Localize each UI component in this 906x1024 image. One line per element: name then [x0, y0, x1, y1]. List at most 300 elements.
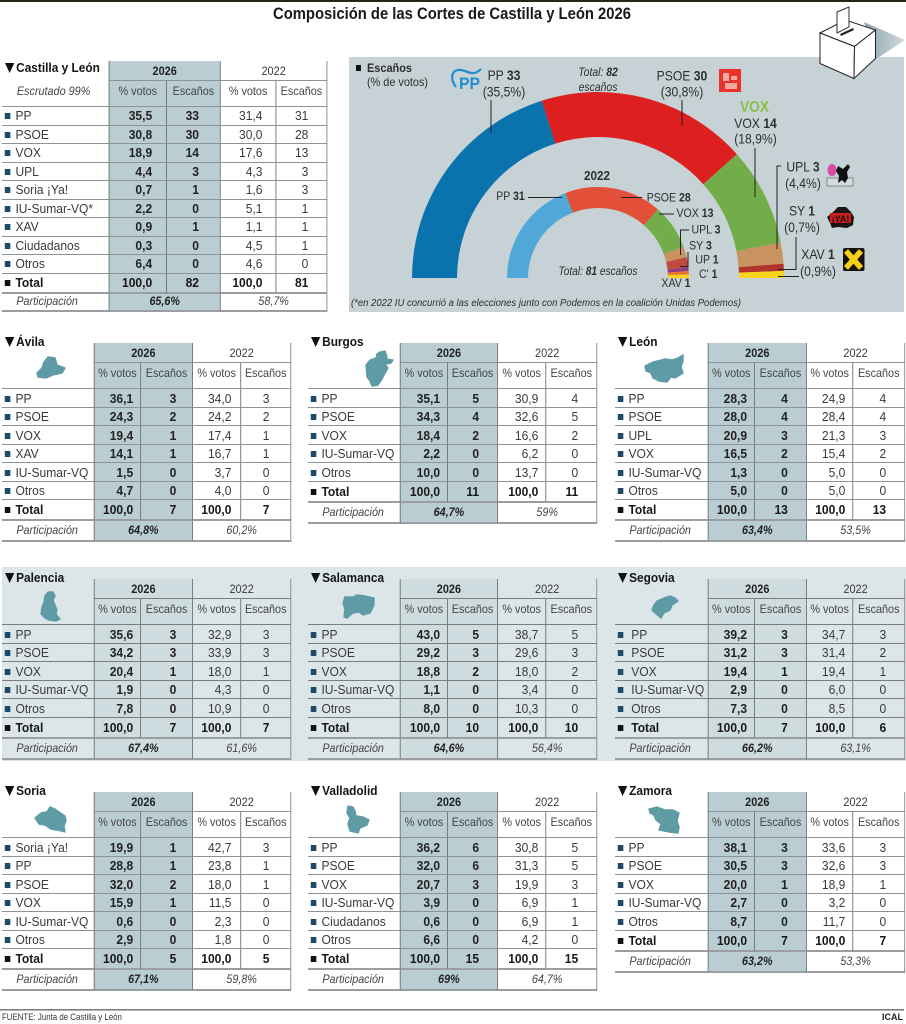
- table: Segovia results: 3: [781, 626, 788, 642]
- table: Castilla y León results: 65,6%: [149, 295, 180, 308]
- table: Salamanca results: VOX: [321, 664, 347, 678]
- table: Zamora results: 2022: [843, 794, 868, 808]
- table: Ávila results: 4,7: [116, 483, 133, 498]
- table: Burgos results: [308, 343, 598, 524]
- table: Palencia results: Total: [15, 720, 43, 735]
- table: Burgos results: 2: [472, 428, 479, 442]
- table: León results: PP: [628, 390, 645, 406]
- table: Zamora results: 33,6: [822, 840, 845, 854]
- table: León results: 13: [774, 502, 788, 517]
- table: Burgos results: 30,9: [515, 390, 538, 406]
- table: León results: 4: [781, 409, 788, 424]
- table: Zamora results: [615, 792, 906, 973]
- table: León results: IU-Sumar-VQ: [628, 464, 701, 480]
- table: Burgos results: 59%: [536, 506, 558, 518]
- credit: ICAL: ICAL: [882, 1012, 903, 1022]
- table: Soria results: 100,0: [201, 951, 231, 966]
- table: Burgos results: 18,4: [417, 428, 440, 442]
- table: Zamora results: 0: [879, 914, 886, 928]
- band: middle row background: [2, 567, 906, 761]
- table: Palencia results: 20,4: [110, 664, 133, 678]
- table: Castilla y León results: PP: [15, 108, 32, 123]
- table: Zamora results: 8,7: [730, 914, 747, 928]
- table: Segovia results: 39,2: [724, 626, 747, 642]
- table: Castilla y León results: 1: [192, 182, 199, 197]
- table: Soria results: Otros: [15, 932, 45, 947]
- table: Castilla y León results: 13: [295, 145, 308, 160]
- table: Zamora results: 20,0: [724, 876, 747, 892]
- table: Soria results: 1: [170, 858, 176, 873]
- table: Segovia results: % votos: [712, 603, 751, 616]
- table: Burgos results: 35,1: [417, 390, 440, 406]
- icon: León map: [644, 354, 684, 383]
- table: León results: 20,9: [724, 428, 747, 442]
- table: Zamora results: 2,7: [730, 895, 747, 910]
- table: Segovia results: IU-Sumar-VQ: [631, 682, 704, 697]
- table: Salamanca results: 64,6%: [434, 742, 464, 754]
- table: León results: 5,0: [829, 464, 845, 480]
- panel: Burgos: [308, 334, 598, 524]
- table: Ávila results: 24,2: [208, 409, 231, 424]
- table: Burgos results: Escaños: [452, 367, 493, 380]
- table: Castilla y León results: 0,9: [135, 219, 152, 234]
- table: Soria results: PSOE: [15, 876, 49, 892]
- table: Soria results: 0: [263, 914, 269, 928]
- table: Ávila results: 0: [263, 483, 269, 498]
- table: Soria results: 0: [170, 932, 176, 947]
- table: Valladolid results: 100,0: [508, 951, 538, 966]
- table: León results: 3: [781, 428, 788, 442]
- table: Salamanca results: 1,1: [423, 682, 440, 697]
- table: Salamanca results: % votos: [502, 603, 541, 616]
- table: Segovia results: 2,9: [730, 682, 747, 697]
- table: Valladolid results: 15: [466, 951, 479, 966]
- table: Ávila results: 64,8%: [128, 524, 159, 536]
- label: PSOE 28: PSOE 28: [647, 192, 691, 205]
- table: Valladolid results: 0: [472, 914, 479, 928]
- table: Ávila results: 100,0: [103, 502, 133, 517]
- table: Segovia results: 6,0: [829, 682, 845, 697]
- icon: ballot box: [820, 7, 905, 78]
- table: Soria results: 2026: [131, 794, 156, 808]
- table: Salamanca results: Otros: [321, 700, 351, 716]
- table: Salamanca results: 2026: [437, 582, 461, 596]
- table: Salamanca results: 100,0: [410, 720, 440, 735]
- table: Valladolid results: 6,9: [522, 914, 538, 928]
- total 2022 label: Total: 81 escaños: [559, 265, 638, 278]
- table: Ávila results: IU-Sumar-VQ: [15, 464, 88, 480]
- table: Ávila results: 1: [263, 446, 269, 461]
- table: León results: 0: [781, 464, 788, 480]
- table: Salamanca results: PSOE: [321, 645, 355, 660]
- table: Ávila results: 3: [263, 390, 269, 406]
- table: Valladolid results: 4,2: [522, 932, 538, 947]
- table: Valladolid results: % votos: [405, 816, 443, 829]
- table: Segovia results: 0: [781, 682, 788, 697]
- table: Segovia results: 31,4: [822, 645, 845, 660]
- label: XAV 1 2022: XAV 1: [661, 277, 691, 290]
- table: Segovia results: Escaños: [760, 603, 801, 616]
- table: Valladolid results: PP: [321, 840, 338, 854]
- table: Salamanca results: 3,4: [522, 682, 538, 697]
- table: Ávila results: 16,7: [208, 446, 231, 461]
- table: Palencia results: 1: [170, 664, 176, 678]
- table: Castilla y León results: 4,6: [246, 256, 262, 271]
- table: Ávila results: Participación: [16, 524, 78, 536]
- heading: Soria: Soria: [16, 783, 46, 798]
- table: Burgos results: 2022: [535, 346, 559, 360]
- table: Ávila results: 3,7: [215, 464, 231, 480]
- panel: Salamanca: [308, 570, 598, 760]
- label: UPL 3: [785, 159, 821, 191]
- table: Soria results: % votos: [98, 816, 137, 829]
- table: Salamanca results: 3: [472, 645, 479, 660]
- table: Zamora results: 3,2: [829, 895, 845, 910]
- table: Segovia results: 3: [781, 645, 788, 660]
- table: Salamanca results: 100,0: [508, 720, 538, 735]
- table: Burgos results: % votos: [405, 367, 443, 380]
- leader: PSOE: [681, 100, 683, 126]
- table: León results: 100,0: [815, 502, 845, 517]
- table: Soria results: 11,5: [209, 895, 231, 910]
- label: SY 1: [784, 203, 820, 235]
- table: Burgos results: 0: [572, 446, 578, 461]
- label: PP 33: (35,5%): [483, 84, 525, 100]
- table: Ávila results: Otros: [15, 483, 45, 498]
- table: Burgos results: 34,3: [417, 409, 440, 424]
- table: Zamora results: 0: [781, 914, 788, 928]
- table: Segovia results: 1: [879, 664, 886, 678]
- table: Castilla y León results: 30: [186, 126, 199, 142]
- table: Salamanca results: 29,2: [417, 645, 440, 660]
- table: Castilla y León results: % votos: [229, 85, 267, 98]
- table: Valladolid results: Otros: [321, 932, 351, 947]
- heading: Burgos: Burgos: [322, 334, 364, 349]
- table: Zamora results: 18,9: [822, 876, 845, 892]
- table: Ávila results: 2: [170, 409, 176, 424]
- icon: UPL logo: [827, 164, 853, 186]
- table: Zamora results: 32,6: [822, 858, 845, 873]
- table: Salamanca results: Escaños: [452, 603, 493, 616]
- table: Ávila results: 1: [263, 428, 269, 442]
- table: Burgos results: 0: [472, 446, 479, 461]
- table: León results: 0: [781, 483, 788, 498]
- heading: Segovia: Segovia: [629, 570, 675, 585]
- table: Burgos results: 11: [565, 484, 578, 499]
- source note: FUENTE: Junta de Castilla y León: [2, 1012, 122, 1022]
- table: Palencia results: 2026: [131, 582, 156, 596]
- table: Valladolid results: 15: [565, 951, 578, 966]
- table: León results: [615, 343, 906, 542]
- table: Castilla y León results: 4,3: [246, 164, 262, 178]
- table: Salamanca results: IU-Sumar-VQ: [321, 682, 394, 697]
- table: Palencia results: 34,2: [110, 645, 133, 660]
- table: Zamora results: 3: [879, 858, 886, 873]
- table: Zamora results: PP: [628, 840, 645, 854]
- table: Ávila results: 4,0: [215, 483, 231, 498]
- panel: Soria: [2, 783, 292, 991]
- table: Burgos results: 11: [466, 484, 479, 499]
- table: Castilla y León results: UPL: [15, 164, 39, 178]
- table: Burgos results: 0: [472, 464, 479, 480]
- table: Castilla y León results: 6,4: [135, 256, 152, 271]
- label: VOX 13: VOX 13: [677, 207, 713, 220]
- table: Soria results: 2,9: [116, 932, 133, 947]
- total 2026 label: Total: 82: [578, 66, 619, 79]
- table: Segovia results: 19,4: [822, 664, 845, 678]
- table: Ávila results: PSOE: [15, 409, 49, 424]
- table: Segovia results: 100,0: [815, 720, 845, 735]
- panel: Valladolid: [308, 783, 598, 991]
- table: Valladolid results: 0: [572, 932, 578, 947]
- table: Soria results: 59,8%: [226, 972, 257, 986]
- table: Castilla y León results: 0: [192, 238, 199, 252]
- footnote: (*en 2022 IU concurrió a las elecciones junto con Podemos en la coalición Unidas Podemos): [351, 297, 741, 309]
- label: UPL 3: UPL 3: [786, 159, 820, 175]
- table: Castilla y León results: 4,4: [135, 164, 152, 178]
- table: León results: 2022: [843, 346, 868, 360]
- table: Soria results: 5: [170, 951, 176, 966]
- table: Zamora results: 0: [879, 895, 886, 910]
- table: Segovia results: [615, 579, 906, 760]
- table: Soria results: 15,9: [110, 895, 133, 910]
- label: PSOE 30: PSOE 30: [657, 68, 707, 84]
- table: Castilla y León results: 4,5: [246, 238, 262, 252]
- table: León results: Otros: [628, 483, 658, 498]
- table: Soria results: Participación: [16, 972, 78, 986]
- table: Castilla y León results: [2, 61, 328, 312]
- table: Valladolid results: 0: [472, 932, 479, 947]
- table: Soria results: 3: [263, 840, 269, 854]
- table: Burgos results: 32,6: [515, 409, 538, 424]
- table: Castilla y León results: Ciudadanos: [15, 238, 80, 252]
- table: Soria results: 67,1%: [128, 972, 159, 986]
- table: Burgos results: Participación: [322, 506, 384, 518]
- table: Castilla y León results: 100,0: [122, 275, 152, 290]
- table: Soria results: 0,6: [116, 914, 133, 928]
- table: Salamanca results: 10: [565, 720, 578, 735]
- table: Ávila results: 7: [263, 502, 269, 517]
- table: Salamanca results: 3: [572, 645, 578, 660]
- table: Valladolid results: 6: [472, 840, 479, 854]
- icon: Soria Ya logo: [827, 207, 854, 228]
- table: Soria results: 2: [170, 876, 176, 892]
- table: Valladolid results: 6,6: [423, 932, 440, 947]
- table: León results: 28,4: [822, 409, 845, 424]
- table: Valladolid results: 64,7%: [532, 972, 562, 986]
- table: Zamora results: 3: [781, 858, 788, 873]
- label: SY 1: SY 1: [789, 203, 815, 219]
- table: Valladolid results: Ciudadanos: [321, 914, 386, 928]
- table: Segovia results: 19,4: [724, 664, 747, 678]
- table: Soria results: 32,0: [110, 876, 133, 892]
- table: Valladolid results: 2026: [437, 794, 461, 808]
- table: Soria results: 0: [263, 895, 269, 910]
- table: Valladolid results: Total: [321, 951, 349, 966]
- table: Salamanca results: 29,6: [515, 645, 538, 660]
- table: Segovia results: Total: [631, 720, 659, 735]
- table: Salamanca results: 43,0: [417, 626, 440, 642]
- table: Valladolid results: Escaños: [452, 816, 493, 829]
- table: Palencia results: Otros: [15, 700, 45, 716]
- table: Burgos results: Otros: [321, 464, 351, 480]
- table: Valladolid results: 0: [472, 895, 479, 910]
- table: Segovia results: 0: [879, 682, 886, 697]
- label: VOX 14: [734, 115, 778, 147]
- table: Burgos results: 2: [572, 428, 578, 442]
- table: Castilla y León results: Participación: [16, 295, 78, 308]
- table: Palencia results: 1,9: [116, 682, 133, 697]
- table: Palencia results: VOX: [15, 664, 41, 678]
- table: Castilla y León results: 2022: [261, 64, 286, 78]
- icon: Segovia map: [651, 595, 679, 619]
- heading: Salamanca: Salamanca: [322, 570, 384, 585]
- table: Soria results: PP: [15, 858, 32, 873]
- table: Castilla y León results: 30,0: [239, 126, 262, 142]
- table: Palencia results: 3: [170, 626, 176, 642]
- table: Castilla y León results: XAV: [15, 219, 39, 234]
- label: 2022: 2022: [584, 168, 610, 183]
- table: Palencia results: PSOE: [15, 645, 49, 660]
- table: Soria results: Soria ¡Ya!: [15, 840, 68, 854]
- table: Zamora results: 0: [781, 895, 788, 910]
- legend: Escaños: (% de votos): [367, 75, 428, 89]
- table: Valladolid results: 36,2: [417, 840, 440, 854]
- table: Burgos results: 64,7%: [434, 506, 464, 518]
- table: Valladolid results: Participación: [322, 972, 384, 986]
- table: Valladolid results: 20,7: [417, 876, 440, 892]
- table: Salamanca results: 18,8: [417, 664, 440, 678]
- table: Zamora results: 11,7: [823, 914, 845, 928]
- table: Palencia results: 4,3: [215, 682, 231, 697]
- table: Segovia results: 8,5: [829, 700, 845, 716]
- table: Burgos results: % votos: [502, 367, 541, 380]
- table: León results: 4: [781, 390, 788, 406]
- table: Castilla y León results: 28: [295, 126, 308, 142]
- heading: León: León: [629, 334, 657, 349]
- table: Zamora results: 2026: [745, 794, 769, 808]
- table: Valladolid results: VOX: [321, 876, 347, 892]
- table: Zamora results: PSOE: [628, 858, 662, 873]
- table: Ávila results: Escaños: [245, 367, 287, 380]
- table: Ávila results: 1: [170, 428, 176, 442]
- panel: León: [615, 334, 906, 542]
- table: Palencia results: 33,9: [208, 645, 231, 660]
- panel: Segovia: [615, 570, 906, 760]
- table: Soria results: 1,8: [215, 932, 231, 947]
- table: Salamanca results: 10,3: [515, 700, 538, 716]
- table: León results: 100,0: [717, 502, 747, 517]
- table: Soria results: 5: [263, 951, 269, 966]
- table: Salamanca results: 0: [472, 700, 479, 716]
- table: Palencia results: Escaños: [245, 603, 287, 616]
- table: Ávila results: VOX: [15, 428, 41, 442]
- table: Valladolid results: 30,8: [515, 840, 538, 854]
- table: Segovia results: 0: [879, 700, 886, 716]
- table: Ávila results: % votos: [98, 367, 137, 380]
- table: León results: 2: [781, 446, 788, 461]
- heading: Ávila: Ávila: [16, 334, 44, 349]
- table: Valladolid results: 0,6: [423, 914, 440, 928]
- table: Salamanca results: 18,0: [515, 664, 538, 678]
- table: León results: 63,4%: [742, 524, 773, 536]
- table: Ávila results: 2022: [229, 346, 254, 360]
- table: Salamanca results: 2022: [535, 582, 559, 596]
- table: León results: 28,3: [724, 390, 747, 406]
- panel: Ávila: [2, 334, 292, 542]
- table: Zamora results: 7: [879, 933, 886, 948]
- table: Soria results: 42,7: [208, 840, 231, 854]
- table: León results: 24,9: [822, 390, 845, 406]
- table: Castilla y León results: Escaños: [173, 85, 214, 98]
- table: Segovia results: Escaños: [858, 603, 900, 616]
- label: VOX 14: (18,9%): [734, 131, 777, 147]
- label: PP 33: PP 33: [488, 67, 520, 83]
- table: León results: UPL: [628, 428, 652, 442]
- table: Valladolid results: 2022: [535, 794, 559, 808]
- table: Palencia results: PP: [15, 626, 32, 642]
- table: León results: 4: [879, 390, 886, 406]
- legend: Escaños: Escaños: [367, 61, 412, 75]
- table: Soria results: 19,9: [110, 840, 133, 854]
- table: Palencia results: 61,6%: [226, 742, 257, 754]
- table: Palencia results: 7: [263, 720, 269, 735]
- table: León results: 28,0: [724, 409, 747, 424]
- table: Soria results: 1: [263, 876, 269, 892]
- table: Palencia results: 0: [170, 700, 176, 716]
- table: Segovia results: 0: [781, 700, 788, 716]
- table: Burgos results: Total: [321, 484, 349, 499]
- table: Ávila results: 3: [170, 390, 176, 406]
- label: XAV 1: XAV 1: [801, 246, 835, 262]
- table: Castilla y León results: % votos: [119, 85, 157, 98]
- leader: SY: [778, 237, 796, 270]
- table: Castilla y León results: 0,3: [135, 238, 152, 252]
- label: PSOE 30: [657, 68, 707, 100]
- table: Soria results: Escaños: [146, 816, 187, 829]
- table: Valladolid results: 5: [572, 840, 578, 854]
- table: Salamanca results: 5: [572, 626, 578, 642]
- table: Burgos results: 2026: [437, 346, 461, 360]
- table: Salamanca results: % votos: [405, 603, 443, 616]
- table: Segovia results: 2022: [843, 582, 868, 596]
- leader: PSOE 2022: [621, 196, 642, 198]
- label: UPL 3: (4,4%): [785, 175, 821, 191]
- table: Valladolid results: 3: [572, 876, 578, 892]
- table: Valladolid results: PSOE: [321, 858, 355, 873]
- table: Zamora results: 53,3%: [840, 954, 871, 968]
- table: Soria results: 2,3: [215, 914, 231, 928]
- table: Palencia results: 3: [170, 645, 176, 660]
- panel: Castilla y León table: [2, 60, 328, 312]
- table: León results: 4: [879, 409, 886, 424]
- icon: PP logo: [452, 69, 481, 93]
- table: León results: % votos: [712, 367, 751, 380]
- table: Valladolid results: 5: [572, 858, 578, 873]
- table: Castilla y León results: 1: [302, 219, 308, 234]
- table: Salamanca results: Escaños: [550, 603, 592, 616]
- table: Castilla y León results: 0: [192, 256, 199, 271]
- table: Soria results: 2022: [229, 794, 254, 808]
- table: Ávila results: 34,0: [208, 390, 231, 406]
- table: Ávila results: 24,3: [110, 409, 133, 424]
- table: Ávila results: Total: [15, 502, 43, 517]
- table: Castilla y León results: 0,7: [135, 182, 152, 197]
- table: Soria results: % votos: [197, 816, 236, 829]
- table: León results: 2: [879, 446, 886, 461]
- table: León results: Total: [628, 502, 656, 517]
- table: Castilla y León results: 31,4: [239, 108, 262, 123]
